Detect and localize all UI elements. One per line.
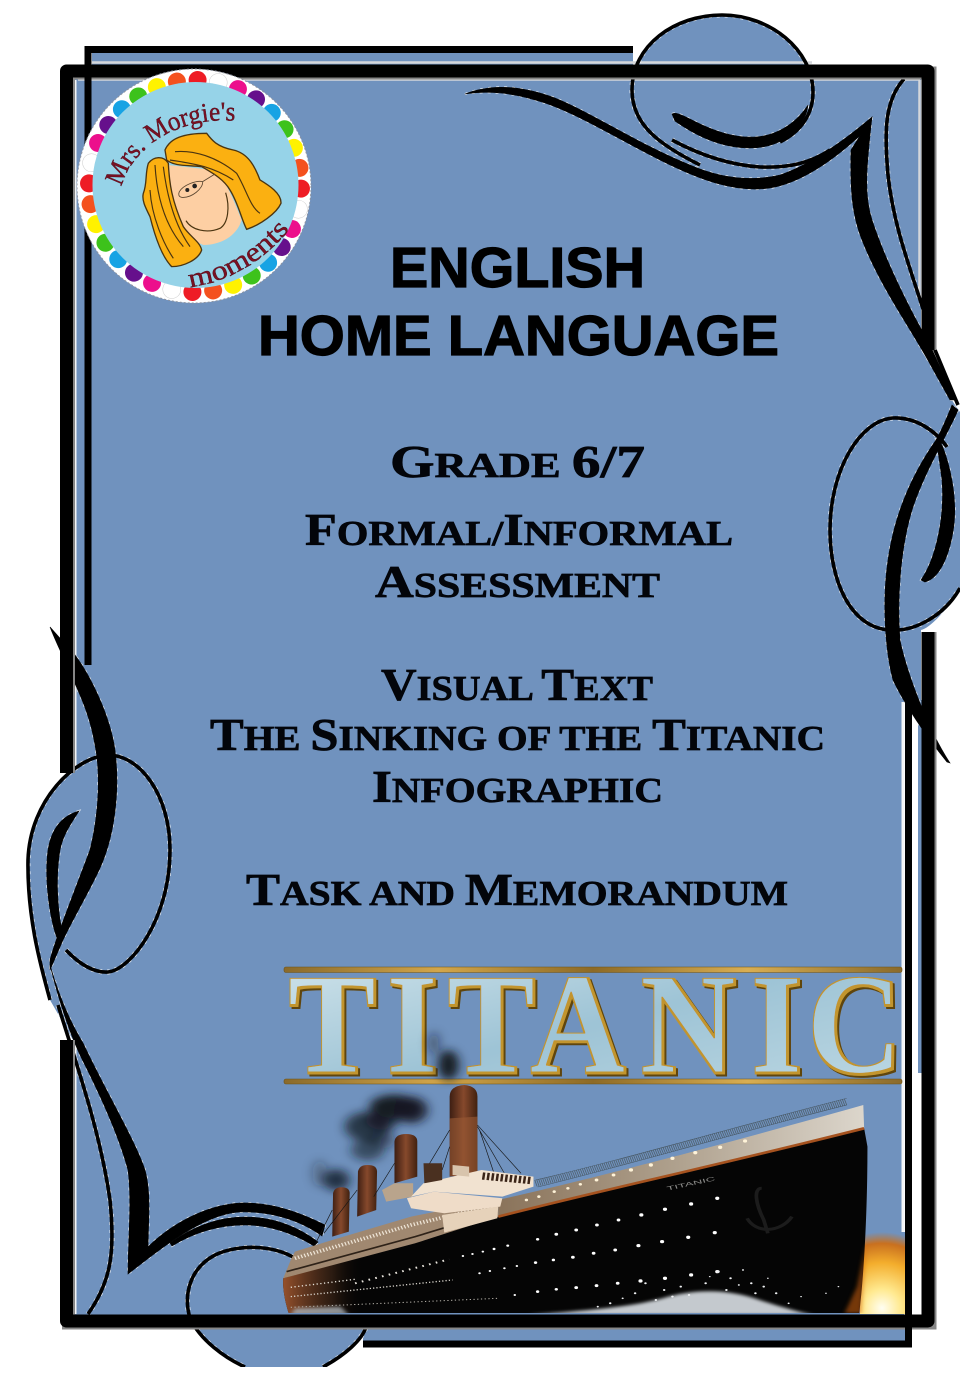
hull name: TITANIC	[666, 1176, 717, 1192]
stern decks	[283, 1200, 498, 1278]
anchor	[747, 1188, 792, 1233]
title: ENGLISH	[390, 236, 645, 300]
Titanic logo: TITANIC	[289, 946, 903, 1104]
cartoon face	[143, 133, 281, 267]
smoke	[312, 1032, 459, 1191]
badge text: moments	[188, 222, 288, 288]
visual text description: VISUAL TEXT	[381, 660, 653, 710]
rigging	[316, 1125, 521, 1243]
visual text description: INFOGRAPHIC	[372, 762, 663, 812]
bow spray	[527, 1291, 814, 1315]
superstructure	[382, 1183, 413, 1202]
badge text	[104, 102, 288, 288]
assessment type	[305, 505, 733, 607]
funnels	[332, 1085, 477, 1237]
assessment type: FORMAL/ INFORMAL	[305, 505, 733, 555]
ship illustration	[283, 1032, 867, 1315]
railing	[536, 1102, 847, 1183]
portholes	[462, 1197, 719, 1296]
logo: Mrs. Morgie's moments badge	[76, 68, 312, 304]
visual text description: THE SINKING OF THE TITANIC	[210, 710, 825, 760]
white upper hull	[498, 1105, 864, 1217]
title	[258, 236, 779, 368]
badge text: Mrs. Morgie's	[104, 102, 234, 186]
visual text description	[210, 660, 825, 812]
hull	[283, 1128, 867, 1313]
rainbow bead ring	[80, 71, 310, 301]
title: HOME LANGUAGE	[258, 304, 779, 368]
glow behind bow	[860, 1232, 905, 1314]
assessment type: ASSESSMENT	[375, 557, 660, 607]
grade heading: G RADE 6/7	[390, 437, 645, 487]
task line: TASK AND MEMORANDUM	[246, 865, 788, 915]
